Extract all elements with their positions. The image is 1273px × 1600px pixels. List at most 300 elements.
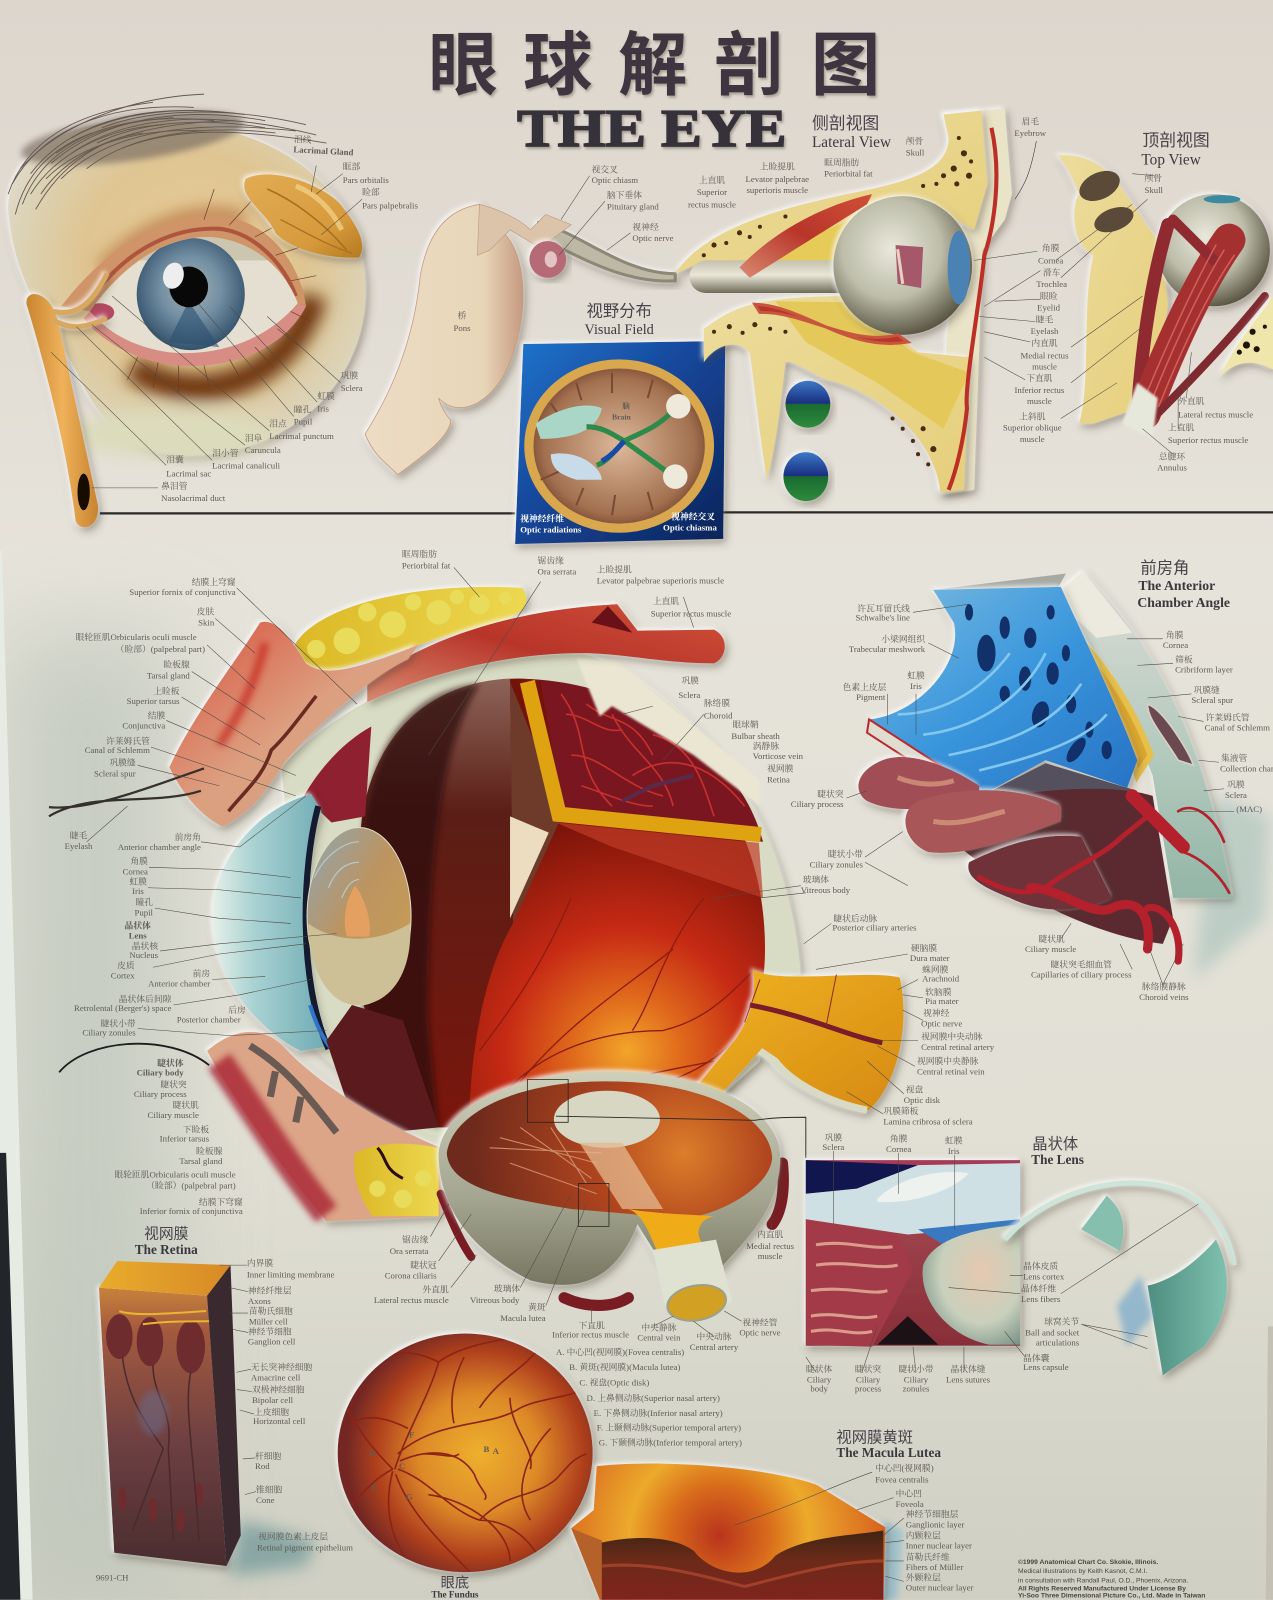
labels: the lens: Lens cortex	[1023, 1271, 1065, 1281]
labels: main eye top and right: Arachnoid	[922, 974, 960, 984]
labels: main eye left: Ciliary body	[137, 1067, 184, 1077]
labels: the retina: Axons	[248, 1296, 271, 1306]
labels: main eye top and right: Sclera	[678, 690, 700, 700]
connector to lens detail	[527, 1079, 609, 1226]
labels: pons and chiasm: Optic chiasm	[592, 175, 638, 185]
heading: top view	[1141, 126, 1210, 169]
labels: the retina: Bipolar cell	[252, 1395, 294, 1405]
labels: the retina: 神经节细胞	[248, 1326, 292, 1336]
labels: macula: 苗勒氏纤维	[906, 1552, 950, 1562]
illustration: eyeball top view	[1158, 194, 1270, 306]
labels: pons and chiasm: 桥	[458, 311, 466, 321]
labels: external eye: Pars orbitalis	[343, 175, 389, 185]
labels: lateral view: 颅骨	[906, 136, 923, 146]
labels: external eye: Caruncula	[245, 445, 281, 455]
labels: main eye left: Ciliary process	[134, 1089, 187, 1099]
illustration: retinal vessels	[479, 898, 755, 1112]
labels: anterior chamber: 小梁网组织	[881, 634, 925, 644]
labels: horizontal section: muscle	[758, 1251, 783, 1261]
labels: main eye left: Superior fornix of conjunctiva	[129, 587, 236, 597]
panel: the lens	[1005, 1132, 1234, 1375]
labels: horizontal section: 睫状冠	[410, 1260, 437, 1270]
labels: main eye top and right: Choroid	[704, 710, 733, 720]
labels: anterior chamber: 巩膜缝	[1193, 685, 1220, 695]
labels: main eye left: 角膜	[130, 856, 148, 866]
labels: fundus letters: G	[406, 1492, 413, 1502]
labels: anterior chamber: 筛板	[1175, 654, 1193, 664]
labels: the lens: Lens fibers	[1021, 1294, 1061, 1304]
labels: macula: 中心凹	[896, 1489, 922, 1499]
labels: the retina: 杆细胞	[255, 1451, 281, 1461]
labels: lateral view: muscle	[1020, 434, 1045, 444]
labels: anterior chamber: Canal of Schlemm	[1205, 723, 1270, 733]
labels: main eye top and right: Ora serrata	[538, 567, 576, 577]
illustration: optic nerve tube	[690, 260, 863, 293]
labels: top view	[1144, 172, 1253, 473]
labels: external eye: Lacrimal punctum	[269, 431, 334, 441]
labels: anterior chamber: Schwalbe's line	[855, 612, 910, 622]
labels: top view: 颅骨	[1144, 173, 1162, 183]
labels: the lens: 晶体皮质	[1023, 1261, 1058, 1271]
labels: main eye left: （睑部）(palpebral part)	[146, 1180, 236, 1191]
illustration: cut retina wedge	[510, 816, 549, 918]
labels: lens box: 角膜	[890, 1134, 907, 1144]
labels: macula: 中心凹(视网膜)	[875, 1463, 934, 1473]
labels: main eye top and right: 视盘	[906, 1085, 923, 1095]
labels: external eye: Pars palpebralis	[362, 200, 418, 210]
labels: pons and chiasm: 视交叉	[592, 165, 618, 175]
labels: pons and chiasm: Pons	[454, 323, 471, 333]
labels: anterior chamber: Sclera	[1225, 790, 1247, 800]
labels: anterior chamber: 脉络膜静脉	[1142, 982, 1186, 992]
labels: the retina: Amacrine cell	[251, 1372, 301, 1382]
labels: main eye top and right: Dura mater	[910, 953, 950, 963]
labels: anterior chamber: Capillaries of ciliary process	[1031, 969, 1132, 979]
illustration: sclera flap	[576, 658, 760, 806]
labels: anterior chamber: 许莱姆氏管	[1206, 712, 1250, 722]
labels: main eye left: Iris	[132, 886, 144, 896]
illustration: ciliary arteries	[979, 796, 1229, 961]
labels: lateral view: rectus muscle	[688, 199, 736, 209]
labels: lateral view: Trochlea	[1036, 279, 1067, 289]
labels: lateral view	[688, 117, 1069, 444]
text block: copyright: Medical illustrations by Keith Kasnot, C.M.I.	[1018, 1568, 1147, 1575]
labels: anterior chamber: 集液管	[1221, 753, 1247, 763]
labels: lens box: Ciliary	[904, 1374, 929, 1384]
labels: external eye: 泪囊	[166, 454, 184, 464]
labels: main eye top and right: Central retinal vein	[917, 1066, 985, 1076]
labels: lateral view: Cornea	[1038, 255, 1063, 265]
labels: main eye left: 睫毛	[70, 831, 87, 841]
labels: the retina: Rod	[255, 1461, 270, 1471]
illustration: levator muscle	[367, 604, 725, 702]
illustration: shadow	[230, 1520, 316, 1576]
labels: lateral view: 下直肌	[1026, 373, 1053, 383]
labels: visual field: Optic radiations	[520, 525, 582, 535]
heading: the lens: 晶状体	[1032, 1132, 1078, 1154]
panel: anterior chamber angle	[760, 555, 1273, 1002]
labels: external eye: Nasolacrimal duct	[161, 493, 226, 503]
labels: lateral view: 上直肌	[699, 175, 725, 185]
labels: anterior chamber: 角膜	[1166, 630, 1183, 640]
labels: external eye: 泪小管	[212, 448, 238, 458]
labels: main eye top and right: Central retinal artery	[921, 1042, 995, 1052]
labels: main eye top and right: 眼球鞘	[732, 720, 759, 730]
illustration: nasal bone	[1058, 155, 1168, 424]
labels: main eye left: Retrolental (Berger's) space	[74, 1003, 171, 1013]
labels: lens box: body	[810, 1384, 828, 1394]
legend: fundus key: A. 中心凹(视网膜)(Fovea centralis)	[556, 1346, 684, 1357]
labels: anterior chamber: 许瓦耳留氏线	[857, 603, 910, 613]
labels: horizontal section: Macula lutea	[500, 1313, 546, 1323]
illustration: interior upper red	[556, 822, 763, 898]
illustration: ciliary body lower	[326, 1005, 439, 1133]
illustration: bowl outer	[439, 1071, 780, 1285]
labels: lens box	[806, 1132, 991, 1394]
labels: horizontal section: Central artery	[690, 1342, 739, 1352]
labels: visual field: Optic chiasma	[663, 523, 717, 533]
illustration: retina block front	[99, 1288, 226, 1566]
illustration: optic nerve	[536, 223, 675, 281]
illustration: ciliary body tissue	[959, 789, 1173, 944]
heading: lateral view	[812, 109, 891, 151]
panel: visual field	[515, 298, 830, 544]
labels: lateral view: superioris muscle	[746, 185, 808, 195]
illustration: crystalline lens	[307, 828, 411, 1005]
labels: main eye left: Cortex	[111, 971, 135, 981]
labels: lens box: Lens sutures	[946, 1374, 991, 1384]
labels: main eye top and right: 脉络膜	[704, 698, 730, 708]
illustration: upper tissue layers	[806, 1160, 918, 1194]
labels: pons and chiasm: 脑下垂体	[607, 190, 642, 200]
labels: main eye left: Inferior fornix of conjunctiva	[140, 1206, 243, 1216]
labels: horizontal section: 中央动脉	[696, 1332, 732, 1342]
labels: the lens: 球窝关节	[1044, 1316, 1079, 1326]
labels: the retina: 无长突神经细胞	[251, 1362, 312, 1372]
labels: main eye top and right: 锯齿缘	[538, 555, 564, 565]
labels: lateral view: 内直肌	[1031, 338, 1058, 348]
labels: main eye left: 上睑板	[153, 686, 180, 696]
labels: main eye left: Pupil	[134, 907, 154, 917]
labels: main eye top and right: 睫状小带	[828, 849, 863, 859]
heading: fundus: The Fundus	[431, 1590, 479, 1600]
labels: macula: Foveola	[896, 1499, 924, 1509]
text block: copyright: in consultation with Randall Paul, O.D., Phoenix, Arizona.	[1018, 1577, 1188, 1584]
labels: macula: Fovea centralis	[875, 1474, 929, 1484]
labels: main eye top and right: Vitreous body	[801, 885, 851, 895]
labels: macula	[875, 1462, 974, 1593]
labels: horizontal section: 下直肌	[578, 1320, 605, 1330]
labels: horizontal section: 外直肌	[423, 1285, 449, 1295]
heading: anterior chamber angle: The Anterior	[1138, 578, 1215, 593]
labels: macula: 外颗粒层	[906, 1572, 941, 1582]
illustration: superior rectus muscle	[740, 194, 872, 278]
labels: the retina: 视网膜色素上皮层	[258, 1532, 328, 1542]
pointer lines	[51, 166, 362, 488]
labels: the retina: 苗勒氏细胞	[249, 1306, 293, 1316]
labels: main eye left: Anterior chamber	[148, 979, 210, 989]
labels: main eye top and right: Retina	[767, 775, 790, 785]
labels: lateral view: 眉毛	[1021, 117, 1039, 127]
labels: main eye left: 后房	[228, 1005, 246, 1015]
illustration: upper periorbital fat	[294, 587, 527, 671]
labels: lens box: Ciliary	[856, 1374, 881, 1384]
heading: the retina	[135, 1223, 198, 1257]
labels: the lens: Ball and socket	[1025, 1328, 1080, 1338]
labels: horizontal section	[374, 1229, 795, 1352]
labels: main eye left: 结膜	[148, 710, 165, 720]
labels: fundus letters: B	[483, 1444, 489, 1454]
labels: external eye: Sclera	[341, 383, 363, 393]
illustration: vitreous chamber	[352, 679, 765, 1127]
icon: ciliary body arc	[59, 1044, 209, 1072]
heading: visual field	[585, 298, 654, 338]
labels: the retina: Müller cell	[249, 1316, 288, 1326]
panel: the retina	[96, 1223, 353, 1582]
labels: anterior chamber: 睫状肌	[1038, 934, 1065, 944]
labels: main eye top and right: 上直肌	[653, 596, 679, 606]
illustration: lens in bowl	[554, 1091, 660, 1148]
labels: lens box: Cornea	[886, 1144, 911, 1154]
labels: anterior chamber: (MAC)	[1236, 804, 1262, 814]
illustration: fat	[775, 204, 913, 266]
illustration: skin strip	[940, 108, 1012, 495]
labels: lens box: 虹膜	[945, 1136, 963, 1146]
heading: top view: Top View	[1141, 152, 1201, 169]
icon: eyelashes	[49, 768, 204, 816]
labels: lateral view: 角膜	[1042, 243, 1059, 253]
illustration: large fiber piece	[1148, 1240, 1227, 1375]
labels: anterior chamber: Cribriform layer	[1175, 664, 1233, 674]
labels: fundus letters: C	[399, 1461, 405, 1471]
labels: lateral view: 睫毛	[1036, 315, 1053, 325]
labels: anterior chamber: Cornea	[1163, 640, 1188, 650]
heading: lateral view: Lateral View	[812, 134, 891, 151]
illustration: upper orbital bone	[675, 110, 987, 274]
labels: anterior chamber: 巩膜	[1227, 780, 1245, 790]
labels: horizontal section: Central vein	[637, 1333, 681, 1343]
legend: fundus key: F. 上颞侧动脉(Superior temporal artery)	[597, 1421, 741, 1432]
labels: visual field: 视神经交叉	[671, 511, 715, 521]
labels: main eye top and right: 睫状突	[817, 789, 844, 799]
illustration: lower eyelid	[84, 303, 306, 366]
illustration: temporal bone	[1219, 296, 1273, 378]
legend: fundus key: B. 黄斑(视网膜)(Macula lutea)	[569, 1361, 681, 1372]
labels: lateral view: Medial rectus	[1021, 350, 1069, 360]
labels: main eye left: 睫状突	[160, 1080, 187, 1090]
labels: the lens: Lens capsule	[1023, 1362, 1069, 1372]
labels: main eye left: Ciliary muscle	[148, 1110, 199, 1120]
labels: external eye: 泪线	[294, 134, 312, 145]
divider line	[100, 512, 1273, 513]
labels: main eye top and right: 蛛网膜	[922, 964, 948, 974]
labels: main eye top and right: Posterior ciliary arteries	[832, 923, 917, 933]
labels: lateral view: Superior	[697, 187, 727, 197]
labels: horizontal section: 中央静脉	[641, 1322, 676, 1332]
labels: main eye top and right: 硬脑膜	[911, 943, 937, 953]
illustration: brain cross-section	[524, 359, 714, 533]
labels: external eye: 瞳孔	[294, 404, 311, 414]
labels: macula: 神经节细胞层	[906, 1509, 958, 1519]
labels: main eye top and right: 巩膜筛板	[883, 1106, 918, 1116]
icon: upper visual field sphere	[785, 381, 830, 428]
labels: lateral view: Superior oblique	[1003, 423, 1062, 433]
illustration: macula front layers	[602, 1530, 883, 1600]
labels: horizontal section: 玻璃体	[494, 1284, 520, 1294]
panel: pons and optic chiasm	[365, 164, 675, 475]
labels: main eye left	[65, 576, 246, 1216]
labels: external eye: 睑部	[362, 187, 380, 197]
labels: external eye: Lacrimal canaliculi	[212, 460, 281, 470]
labels: fundus letters: D	[369, 1448, 376, 1458]
labels: external eye: Lacrimal sac	[166, 469, 211, 479]
illustration: pons	[365, 204, 523, 475]
illustration: lower eyelid section	[207, 1032, 441, 1221]
labels: main eye left: 晶状体	[125, 921, 151, 931]
labels: main eye left: Scleral spur	[94, 769, 136, 779]
illustration: cornea	[212, 794, 332, 1051]
labels: horizontal section: Inferior rectus muscle	[552, 1330, 629, 1340]
labels: visual field	[520, 400, 717, 535]
legend: fundus key	[556, 1346, 742, 1448]
labels: external eye: 虹膜	[317, 391, 335, 401]
labels: lens box: 睫状小带	[898, 1364, 934, 1374]
illustration: vitreous body left	[352, 679, 513, 1127]
labels: horizontal section: 内直肌	[757, 1230, 783, 1240]
labels: lens box: 睫状体	[806, 1364, 832, 1374]
icon: lower visual field sphere	[783, 452, 828, 501]
heading: macula lutea: 视网膜黄斑	[836, 1426, 913, 1448]
illustration: tissue background	[806, 1160, 1020, 1346]
labels: external eye: 鼻泪管	[161, 481, 187, 491]
labels: main eye left: 晶状体后间隙	[119, 994, 171, 1004]
illustration: lacrimal duct	[26, 274, 107, 527]
labels: horizontal section: Ora serrata	[390, 1246, 429, 1256]
labels: main eye left: 前房	[193, 968, 210, 978]
illustration: lens arc	[1005, 1183, 1234, 1265]
heading: anterior chamber angle: Chamber Angle	[1137, 595, 1230, 610]
labels: main eye top and right: Vorticose vein	[753, 751, 804, 761]
illustration: shading under eye	[71, 216, 314, 458]
illustration: canal of Schlemm	[1148, 704, 1193, 765]
labels: main eye left: 睑板腺	[196, 1146, 222, 1156]
labels: top view: Superior rectus muscle	[1168, 435, 1248, 445]
labels: fundus letters: A	[493, 1446, 500, 1456]
labels: horizontal section: Medial rectus	[746, 1241, 795, 1251]
illustration: sclera outer coat	[282, 652, 801, 1153]
labels: external eye	[161, 133, 418, 503]
labels: lateral view: Skull	[906, 147, 925, 157]
labels: the lens	[1021, 1260, 1080, 1372]
illustration: optic nerve main	[685, 969, 903, 1110]
labels: main eye left: Lens	[129, 931, 147, 941]
illustration: face skin	[8, 120, 366, 456]
labels: the retina: Inner limiting membrane	[247, 1269, 335, 1279]
labels: main eye top and right: Superior rectus muscle	[651, 608, 731, 618]
labels: external eye: 泪阜	[245, 433, 262, 443]
labels: macula: Outer nuclear layer	[906, 1583, 974, 1593]
labels: main eye top and right: Lamina cribrosa of sclera	[883, 1116, 973, 1126]
labels: main eye left: 皮肤	[197, 606, 214, 616]
heading: the retina: The Retina	[135, 1242, 198, 1257]
labels: main eye top and right: Levator palpebrae superioris muscle	[597, 576, 724, 586]
labels: main eye top and right: 视网膜中央静脉	[917, 1056, 978, 1066]
labels: anterior chamber: 虹膜	[907, 671, 925, 681]
labels: lateral view: 上斜肌	[1019, 412, 1045, 422]
labels: anterior chamber: Pigment	[856, 692, 886, 702]
labels: lens box: Ciliary	[807, 1374, 832, 1384]
panel: lateral view	[675, 108, 1069, 495]
illustration: lower orbital bone	[704, 296, 969, 492]
labels: main eye left: Inferior tarsus	[160, 1134, 210, 1144]
labels: main eye top and right: Bulbar sheath	[731, 731, 780, 741]
heading: macula lutea	[836, 1426, 941, 1460]
illustration: lens sphere	[923, 1224, 1020, 1345]
labels: pons and chiasm	[454, 164, 674, 333]
illustration: eyelashes	[128, 189, 316, 393]
heading: lateral view: 侧剖视图	[812, 109, 879, 134]
illustration: fundus vessels	[347, 1337, 587, 1571]
illustration: retina block side	[207, 1265, 241, 1566]
labels: main eye left: Posterior chamber	[177, 1014, 241, 1024]
labels: main eye left: 睫状肌	[173, 1100, 199, 1110]
labels: main eye left: Superior tarsus	[127, 696, 180, 706]
illustration: muscles behind bowl	[441, 1163, 783, 1305]
labels: the retina: Ganglion cell	[248, 1337, 296, 1347]
labels: pons and chiasm: 视神经	[632, 222, 659, 232]
heading: anterior chamber angle: 前房角	[1140, 555, 1189, 579]
labels: main eye top and right: Optic nerve	[921, 1018, 962, 1028]
labels: main eye left: Tarsal gland	[179, 1156, 223, 1166]
heading: visual field: 视野分布	[587, 298, 652, 322]
labels: main eye left: （睑部）(palpebral part)	[116, 643, 205, 654]
labels: macula: Ganglionic layer	[906, 1519, 965, 1529]
labels: main eye top and right: 视神经	[923, 1008, 949, 1018]
labels: the lens: articulations	[1036, 1338, 1080, 1348]
illustration: choroid vessels	[515, 679, 763, 842]
heading: the lens: The Lens	[1031, 1152, 1084, 1167]
illustration: pituitary gland	[529, 241, 566, 278]
labels: pons and chiasm: Pituitary gland	[607, 201, 659, 211]
heading: visual field: Visual Field	[585, 322, 654, 338]
labels: lateral view: muscle	[1027, 396, 1052, 406]
heading: the lens	[1031, 1132, 1084, 1167]
labels: lateral view: Inferior rectus	[1014, 385, 1065, 395]
labels: main eye top and right: 软脑膜	[925, 987, 951, 997]
title: English heading: THE EYE	[517, 100, 786, 158]
labels: macula: Fibers of Müller	[906, 1562, 963, 1572]
labels: main eye top and right: Pia mater	[925, 996, 959, 1006]
heading: fundus	[431, 1571, 479, 1600]
legend: fundus key: C. 视盘(Optic disk)	[579, 1376, 649, 1387]
labels: main eye left: Nucleus	[129, 950, 159, 960]
illustration: upper eyelid	[61, 216, 306, 311]
labels: main eye top and right: 视网膜中央动脉	[921, 1032, 982, 1042]
labels: main eye top and right: Ciliary zonules	[810, 859, 864, 869]
labels: main eye left: 瞳孔	[135, 897, 153, 907]
labels: lateral view: muscle	[1032, 362, 1057, 372]
labels: macula: Inner nuclear layer	[906, 1541, 972, 1551]
labels: external eye: Pupil	[294, 417, 313, 427]
labels: main eye top and right: 玻璃体	[803, 875, 829, 885]
pointer lines	[87, 567, 923, 1114]
heading: macula lutea: The Macula Lutea	[836, 1445, 941, 1460]
illustration: macula left face	[571, 1528, 606, 1600]
title: Chinese heading: 眼球解剖图	[428, 9, 880, 109]
illustration: teal shadow	[1193, 796, 1270, 980]
labels: top view: 外直肌	[1178, 396, 1204, 406]
text block: copyright	[1018, 1558, 1205, 1600]
